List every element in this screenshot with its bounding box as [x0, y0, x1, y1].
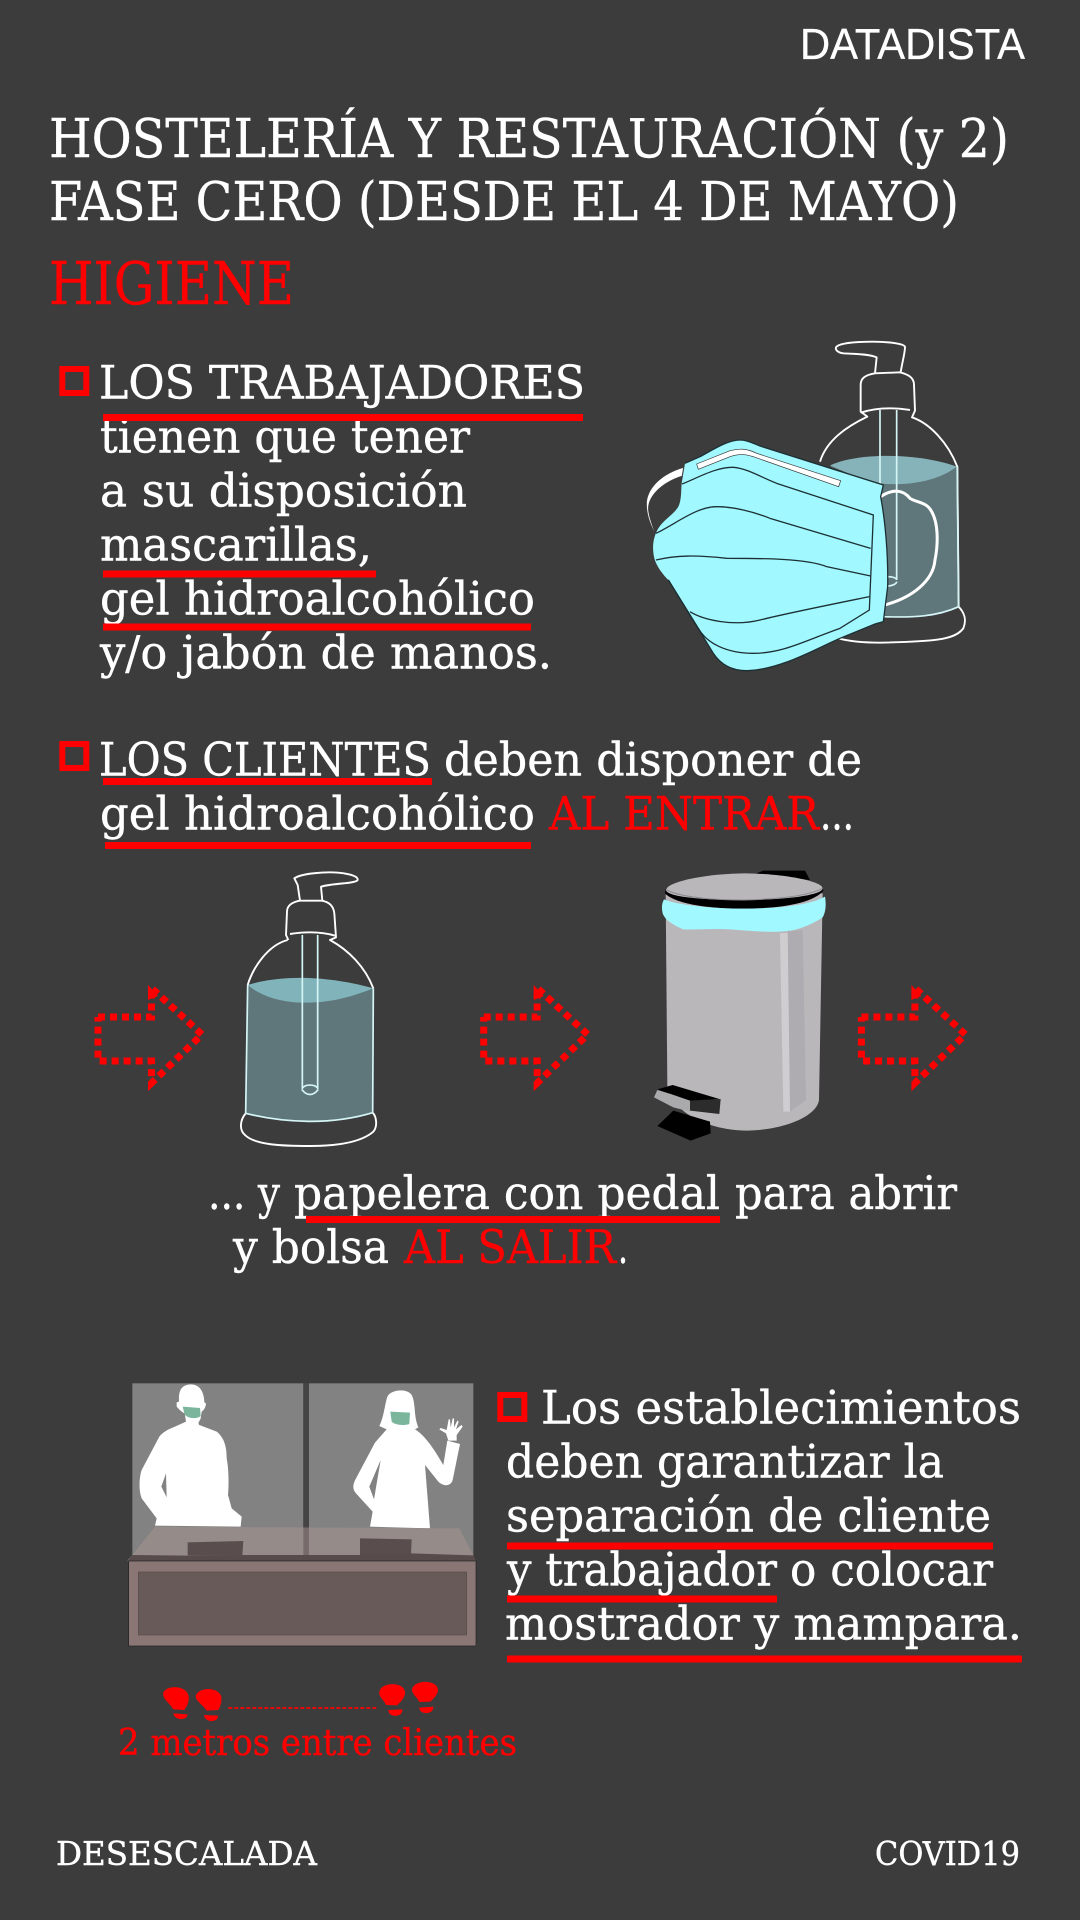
text block: papelera: para abrir [735, 1167, 957, 1220]
text block: papelera: . [618, 1221, 628, 1274]
person: worker [140, 1384, 242, 1527]
paragraph lines: mostrador y mampara. [505, 1598, 1022, 1650]
screen panels [132, 1383, 473, 1555]
paragraph lines: LOS TRABAJADORES [99, 356, 585, 410]
counter top [127, 1527, 475, 1561]
footprints left [163, 1687, 221, 1721]
text block: papelera: ... y [208, 1167, 280, 1220]
paragraph lines [99, 734, 862, 840]
paragraph lines: Los establecimientos [541, 1382, 1021, 1434]
icon: pedal bin [654, 871, 826, 1141]
paragraph lines [505, 1382, 1022, 1650]
footer: DESESCALADA: DESESCALADA [56, 1834, 318, 1873]
bullet square [62, 744, 86, 768]
person: customer [353, 1390, 463, 1528]
dotted line [228, 1705, 377, 1710]
underlines [507, 1542, 1022, 1662]
paragraph lines: deben garantizar la [506, 1436, 944, 1488]
paragraph lines: y/o jabón de manos. [99, 626, 552, 680]
bullet square [500, 1395, 524, 1419]
footer: COVID19: COVID19 [875, 1834, 1020, 1873]
title: HOSTELERÍA Y RESTAURACIÓN (y 2) [49, 108, 1009, 170]
underlines [103, 778, 531, 849]
underlines [103, 414, 583, 630]
arrow 3 [861, 985, 965, 1083]
icon: surgical mask [647, 440, 937, 671]
counter body [129, 1561, 476, 1646]
text block: clientes [62, 734, 862, 849]
arrow 1 [98, 985, 202, 1083]
text block: papelera [208, 1167, 957, 1274]
arrow 2 [484, 985, 588, 1083]
paragraph lines: tienen que tener [100, 410, 470, 464]
icon: bottle [820, 342, 965, 643]
paragraph lines [99, 356, 585, 680]
footprints right [379, 1682, 438, 1716]
paragraph lines: gel hidroalcohólico [100, 572, 535, 626]
paragraph lines: LOS CLIENTES [99, 734, 431, 786]
paragraph lines: separación de cliente [506, 1490, 991, 1542]
illustration: mask and gel bottle [647, 342, 965, 671]
heading: HIGIENE: HIGIENE [49, 249, 294, 318]
items on counter [188, 1538, 412, 1555]
text block: papelera: AL SALIR [403, 1221, 618, 1274]
paragraph lines: gel hidroalcohólico [100, 788, 535, 840]
paragraph lines: y trabajador [506, 1544, 777, 1596]
paragraph lines: a su disposición [100, 464, 467, 518]
title [49, 108, 1009, 233]
bullet square [62, 369, 86, 393]
paragraph lines: mascarillas, [100, 518, 372, 572]
text block: papelera: papelera con pedal [294, 1167, 720, 1220]
paragraph lines: AL ENTRAR [548, 788, 821, 840]
brand: DATADISTA: DATADISTA [800, 20, 1026, 69]
paragraph lines: deben disponer de [444, 734, 862, 786]
text block: separación [500, 1382, 1022, 1662]
paragraph lines: o colocar [790, 1544, 993, 1596]
illustration: counter with screen and people [127, 1383, 476, 1646]
text block: papelera: y bolsa [232, 1221, 389, 1274]
distance marker: footprints [163, 1682, 438, 1721]
text block: trabajadores [62, 356, 585, 680]
icon: gel bottle [241, 872, 376, 1146]
caption: 2 metros entre clientes: 2 metros entre clientes [118, 1723, 517, 1764]
underline [306, 1216, 720, 1223]
paragraph lines: ... [820, 788, 854, 840]
title: FASE CERO (DESDE EL 4 DE MAYO) [49, 172, 959, 233]
